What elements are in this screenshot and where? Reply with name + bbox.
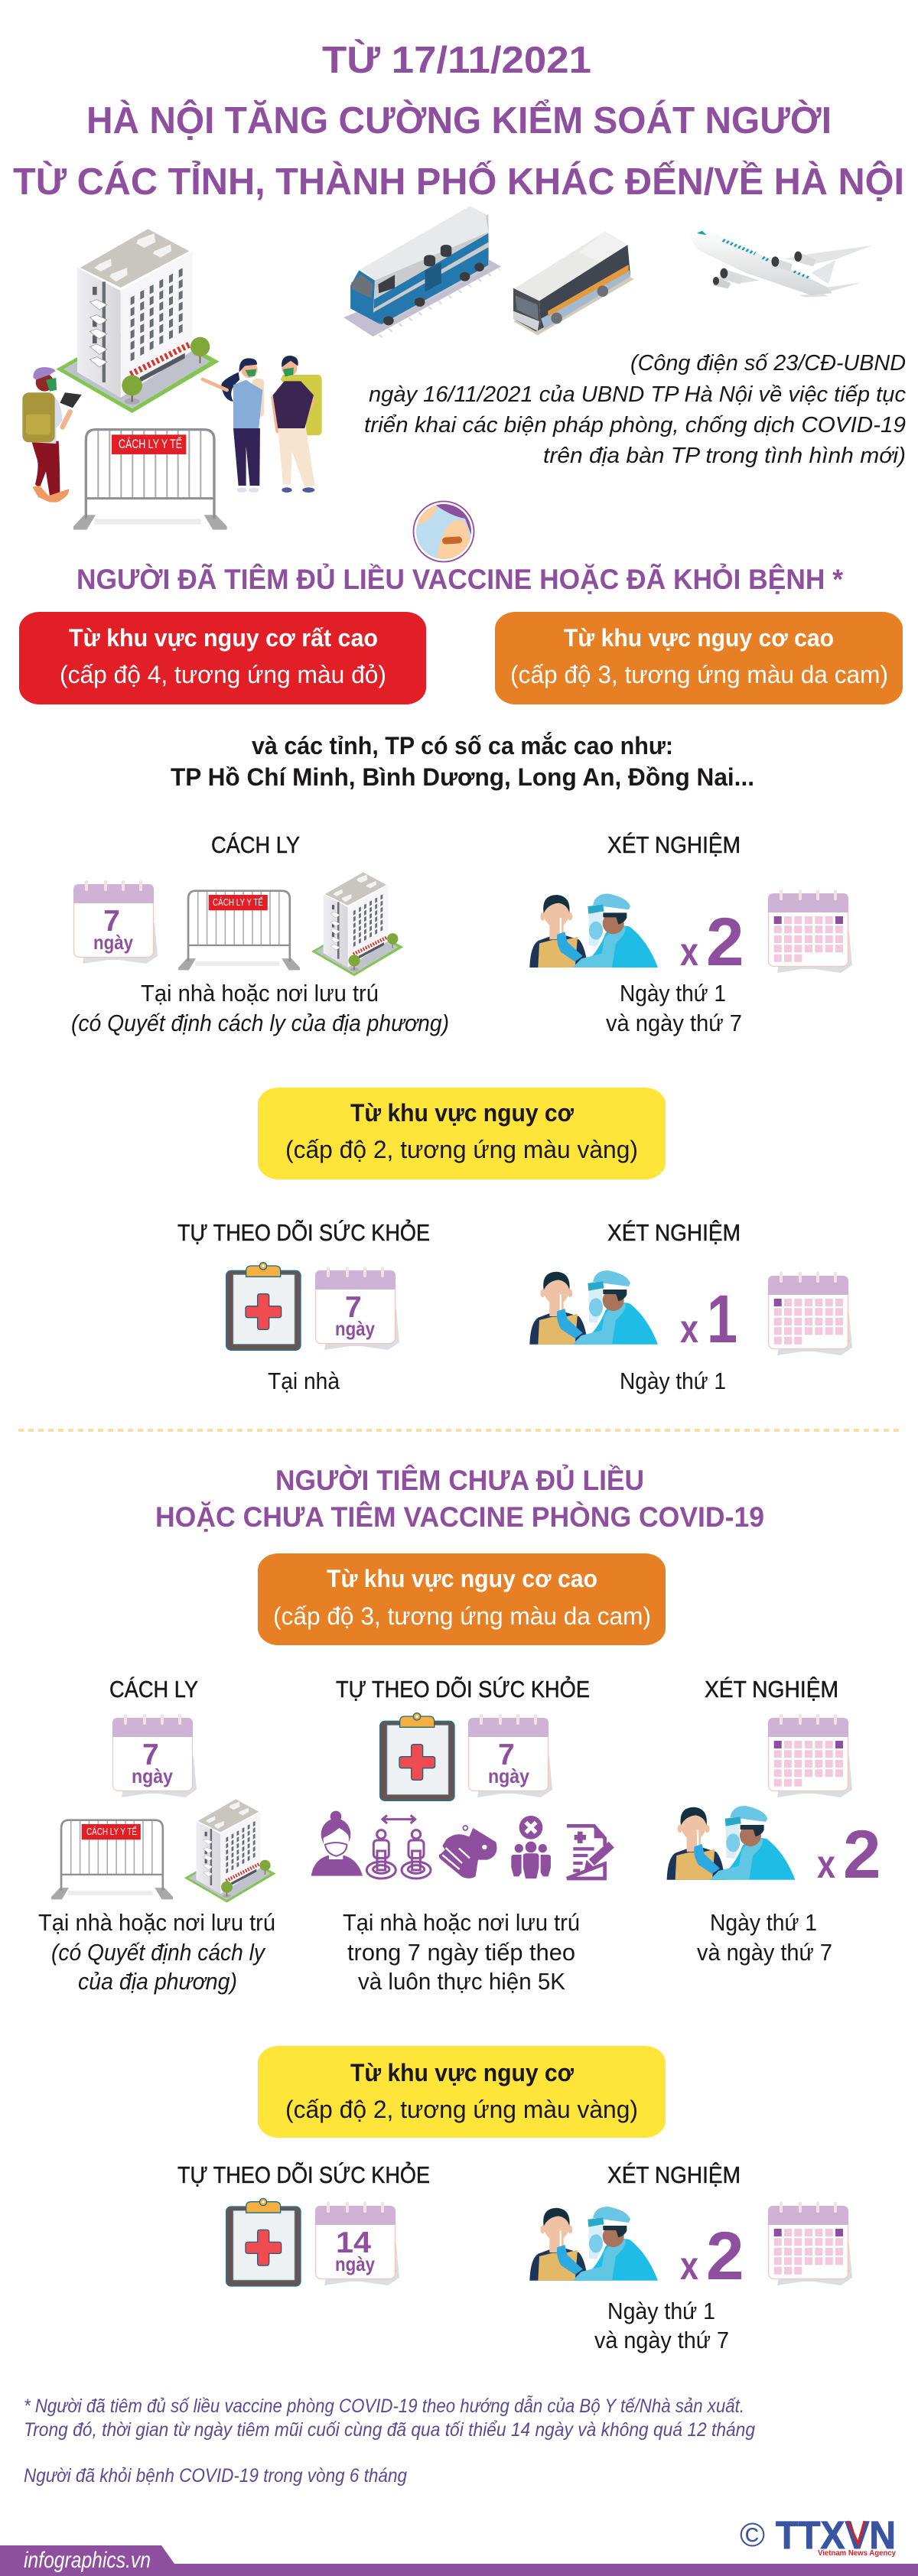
- title: TỪ CÁC TỈNH, THÀNH PHỐ KHÁC ĐẾN/VỀ HÀ NỘI: [13, 161, 904, 203]
- panel: red zone: Từ khu vực nguy cơ rất cao: [69, 624, 378, 652]
- icon: 14-day calendar: [315, 2204, 399, 2285]
- caption: Ngày thứ 1: [710, 1909, 817, 1936]
- multiplier x2: x: [680, 2244, 698, 2288]
- text block: legal reference: triển khai các biện pháp phòng, chống dịch COVID-19: [364, 413, 906, 437]
- icon: month calendar: [768, 891, 852, 973]
- icon: quarantine fence in hero: [73, 430, 227, 530]
- title: HÀ NỘI TĂNG CƯỜNG KIỂM SOÁT NGƯỜI: [86, 99, 832, 141]
- icon group: 5K rules: [311, 1811, 611, 1879]
- column: self monitoring, section 1: [177, 1218, 430, 1394]
- caption: và ngày thứ 7: [697, 1939, 832, 1966]
- column: quarantine, section 2: CÁCH LY: [109, 1676, 198, 1703]
- footnotes: Trong đó, thời gian từ ngày tiêm mũi cuối cùng đã qua tối thiểu 14 ngày và không quá 12 tháng: [24, 2419, 755, 2441]
- title: [13, 39, 904, 203]
- icon: 7-day calendar: [468, 1716, 552, 1797]
- caption: và ngày thứ 7: [606, 1010, 742, 1036]
- icon: nasal swab test: [529, 1270, 658, 1345]
- icon: 7-day calendar: ngày: [93, 931, 133, 954]
- column: self monitoring, section 2: [311, 1675, 611, 1995]
- icon: building: [311, 871, 403, 976]
- caption: [606, 980, 742, 1036]
- panel: orange zone, section 2: [258, 1553, 666, 1645]
- icon: 14-day calendar: 14: [336, 2226, 371, 2259]
- caption: của địa phương): [78, 1968, 237, 1995]
- icon: 7-day calendar: 7: [142, 1738, 159, 1771]
- text block: high-case provinces: và các tỉnh, TP có số ca mắc cao như:: [252, 732, 673, 759]
- column: quarantine, section 1: [71, 831, 449, 1036]
- caption: Tại nhà hoặc nơi lưu trú: [38, 1909, 275, 1936]
- icon: month calendar: [768, 1716, 852, 1797]
- icon: fence: CÁCH LY Y TẾ: [86, 1826, 137, 1837]
- multiplier x2: x: [817, 1843, 835, 1887]
- caption: [38, 1909, 275, 1995]
- title: TỪ 17/11/2021: [322, 39, 591, 81]
- footnotes: Người đã khỏi bệnh COVID-19 trong vòng 6 tháng: [24, 2465, 407, 2487]
- logo: TTXVN: Vietnam News Agency: [818, 2549, 896, 2558]
- logo: TTXVN: ©: [740, 2516, 765, 2554]
- caption: Tại nhà hoặc nơi lưu trú: [343, 1909, 580, 1936]
- multiplier x2: [817, 1816, 881, 1892]
- panel: yellow zone, section 2: Từ khu vực nguy cơ: [350, 2059, 574, 2086]
- panel: orange zone: Từ khu vực nguy cơ cao: [564, 624, 834, 652]
- text block: legal reference: trên địa bàn TP trong tình hình mới): [543, 444, 906, 468]
- multiplier x2: [680, 903, 744, 980]
- column: testing, yellow zone section 2: [529, 2161, 852, 2353]
- icon: no gathering: [511, 1816, 551, 1879]
- icon: building: [184, 1798, 276, 1902]
- caption: và luôn thực hiện 5K: [358, 1968, 565, 1995]
- column: self monitoring, yellow zone section 2: [177, 2161, 430, 2286]
- icon: 7-day calendar: 7: [103, 905, 120, 938]
- heading: not fully vaccinated section: NGƯỜI TIÊM CHƯA ĐỦ LIỀU: [275, 1464, 644, 1496]
- icon: building in hero: [56, 227, 220, 413]
- heading: not fully vaccinated section: [155, 1464, 764, 1533]
- icon: woman traveller pointing: [203, 358, 264, 493]
- icon: 7-day calendar: ngày: [335, 1317, 375, 1340]
- caption: [594, 2298, 729, 2353]
- multiplier x2: 2: [706, 2217, 744, 2294]
- caption: [343, 1909, 580, 1995]
- logo: TTXVN: TTXVN: [776, 2513, 896, 2557]
- icon: 14-day calendar: ngày: [335, 2252, 375, 2275]
- caption: Ngày thứ 1: [607, 2298, 715, 2324]
- text block: legal reference: ngày 16/11/2021 của UBND TP Hà Nội về việc tiếp tục: [369, 382, 906, 407]
- multiplier x1: 1: [707, 1280, 737, 1357]
- text block: legal reference: (Công điện số 23/CĐ-UBND: [630, 351, 906, 376]
- caption: Tại nhà hoặc nơi lưu trú: [141, 980, 379, 1007]
- caption: trong 7 ngày tiếp theo: [347, 1939, 575, 1966]
- column: quarantine, section 1: CÁCH LY: [211, 831, 300, 858]
- icon: fence: [51, 1820, 173, 1899]
- panel: yellow zone, section 2: (cấp độ 2, tương ứng màu vàng): [285, 2096, 638, 2123]
- icon: 7-day calendar: ngày: [488, 1764, 529, 1787]
- column: testing, section 2: [667, 1676, 881, 1966]
- text block: high-case provinces: TP Hồ Chí Minh, Bình Dương, Long An, Đồng Nai...: [171, 763, 754, 791]
- icon: quarantine fence in hero: CÁCH LY Y TẾ: [119, 437, 182, 451]
- panel: orange zone: (cấp độ 3, tương ứng màu da cam): [510, 661, 888, 688]
- icon: 7-day calendar: ngày: [132, 1764, 173, 1787]
- icon: distance: [366, 1815, 431, 1878]
- icon: 7-day calendar: [315, 1268, 399, 1350]
- column: self monitoring, section 2: TỰ THEO DÕI SỨC KHỎE: [336, 1675, 590, 1703]
- multiplier x1: [680, 1280, 737, 1357]
- caption: [71, 980, 449, 1036]
- icon: fence: [178, 891, 300, 970]
- column: testing, yellow zone: [529, 1219, 852, 1394]
- icon: nasal swab test: [529, 2207, 658, 2281]
- footnotes: [24, 2395, 755, 2487]
- multiplier x1: x: [680, 1307, 698, 1351]
- panel: yellow zone: [258, 1088, 666, 1179]
- multiplier x2: x: [680, 930, 698, 974]
- column: testing, yellow zone section 2: XÉT NGHIỆM: [607, 2161, 741, 2188]
- caption: [697, 1909, 832, 1966]
- column: testing, yellow zone: XÉT NGHIỆM: [607, 1219, 741, 1246]
- icon: clipboard: [226, 1263, 301, 1350]
- icon: nasal swab test: [529, 893, 658, 968]
- icon: mask: [311, 1811, 363, 1876]
- icon: hand washing: [439, 1826, 496, 1878]
- caption: Tại nhà: [268, 1368, 340, 1394]
- panel: red zone: [19, 612, 426, 704]
- column: self monitoring, section 1: TỰ THEO DÕI SỨC KHỎE: [177, 1218, 430, 1246]
- caption: Ngày thứ 1: [620, 980, 726, 1007]
- panel: orange zone, section 2: Từ khu vực nguy cơ cao: [327, 1565, 597, 1592]
- column: testing, section 2: XÉT NGHIỆM: [705, 1676, 838, 1703]
- icon: 7-day calendar: [73, 882, 158, 964]
- column: testing, section 1: [529, 831, 852, 1036]
- icon: traveller with tablet: [22, 367, 82, 503]
- icon: month calendar: [768, 2204, 852, 2285]
- footer band: [0, 2545, 918, 2576]
- icon: 7-day calendar: 7: [345, 1291, 362, 1324]
- icon: month calendar: [768, 1273, 852, 1355]
- column: testing, section 1: XÉT NGHIỆM: [607, 831, 741, 858]
- icon: 7-day calendar: 7: [498, 1738, 515, 1771]
- column: quarantine, section 2: [38, 1676, 276, 1995]
- panel: orange zone, section 2: (cấp độ 3, tương ứng màu da cam): [273, 1602, 651, 1630]
- icon: medical declaration: [567, 1826, 611, 1878]
- caption: (có Quyết định cách ly của địa phương): [71, 1010, 449, 1036]
- icon: fence: CÁCH LY Y TẾ: [213, 896, 263, 908]
- caption: (có Quyết định cách ly: [51, 1939, 266, 1966]
- panel: yellow zone: Từ khu vực nguy cơ: [350, 1099, 574, 1127]
- column: self monitoring, yellow zone section 2: TỰ THEO DÕI SỨC KHỎE: [177, 2161, 430, 2188]
- icon: man traveller with backpack: [273, 356, 322, 493]
- multiplier x2: 2: [843, 1816, 881, 1892]
- text block: legal reference: [364, 351, 906, 468]
- icon: clipboard: [380, 1713, 454, 1800]
- icon: airplane: [691, 228, 872, 297]
- icon: vaccinated arm: [413, 501, 474, 562]
- heading: not fully vaccinated section: HOẶC CHƯA TIÊM VACCINE PHÒNG COVID-19: [155, 1501, 764, 1533]
- heading: vaccinated section: NGƯỜI ĐÃ TIÊM ĐỦ LIỀU VACCINE HOẶC ĐÃ KHỎI BỆNH *: [76, 563, 844, 595]
- multiplier x2: [680, 2217, 744, 2294]
- footer band: infographics.vn: [24, 2548, 151, 2573]
- text block: high-case provinces: [171, 732, 754, 791]
- icon: 7-day calendar: [112, 1716, 197, 1797]
- icon: nasal swab test: [667, 1806, 795, 1880]
- icon: bus: [513, 232, 634, 335]
- panel: yellow zone, section 2: [258, 2046, 666, 2138]
- panel: orange zone: [495, 612, 903, 704]
- panel: red zone: (cấp độ 4, tương ứng màu đỏ): [60, 661, 386, 688]
- multiplier x2: 2: [706, 903, 744, 980]
- panel: yellow zone: (cấp độ 2, tương ứng màu vàng): [285, 1136, 638, 1163]
- icon: clipboard: [226, 2198, 301, 2286]
- caption: Ngày thứ 1: [620, 1368, 726, 1394]
- caption: và ngày thứ 7: [594, 2327, 729, 2353]
- footnotes: * Người đã tiêm đủ số liều vaccine phòng COVID-19 theo hướng dẫn của Bộ Y tế/Nhà sản xuất.: [24, 2395, 744, 2417]
- icon: train: [343, 206, 501, 337]
